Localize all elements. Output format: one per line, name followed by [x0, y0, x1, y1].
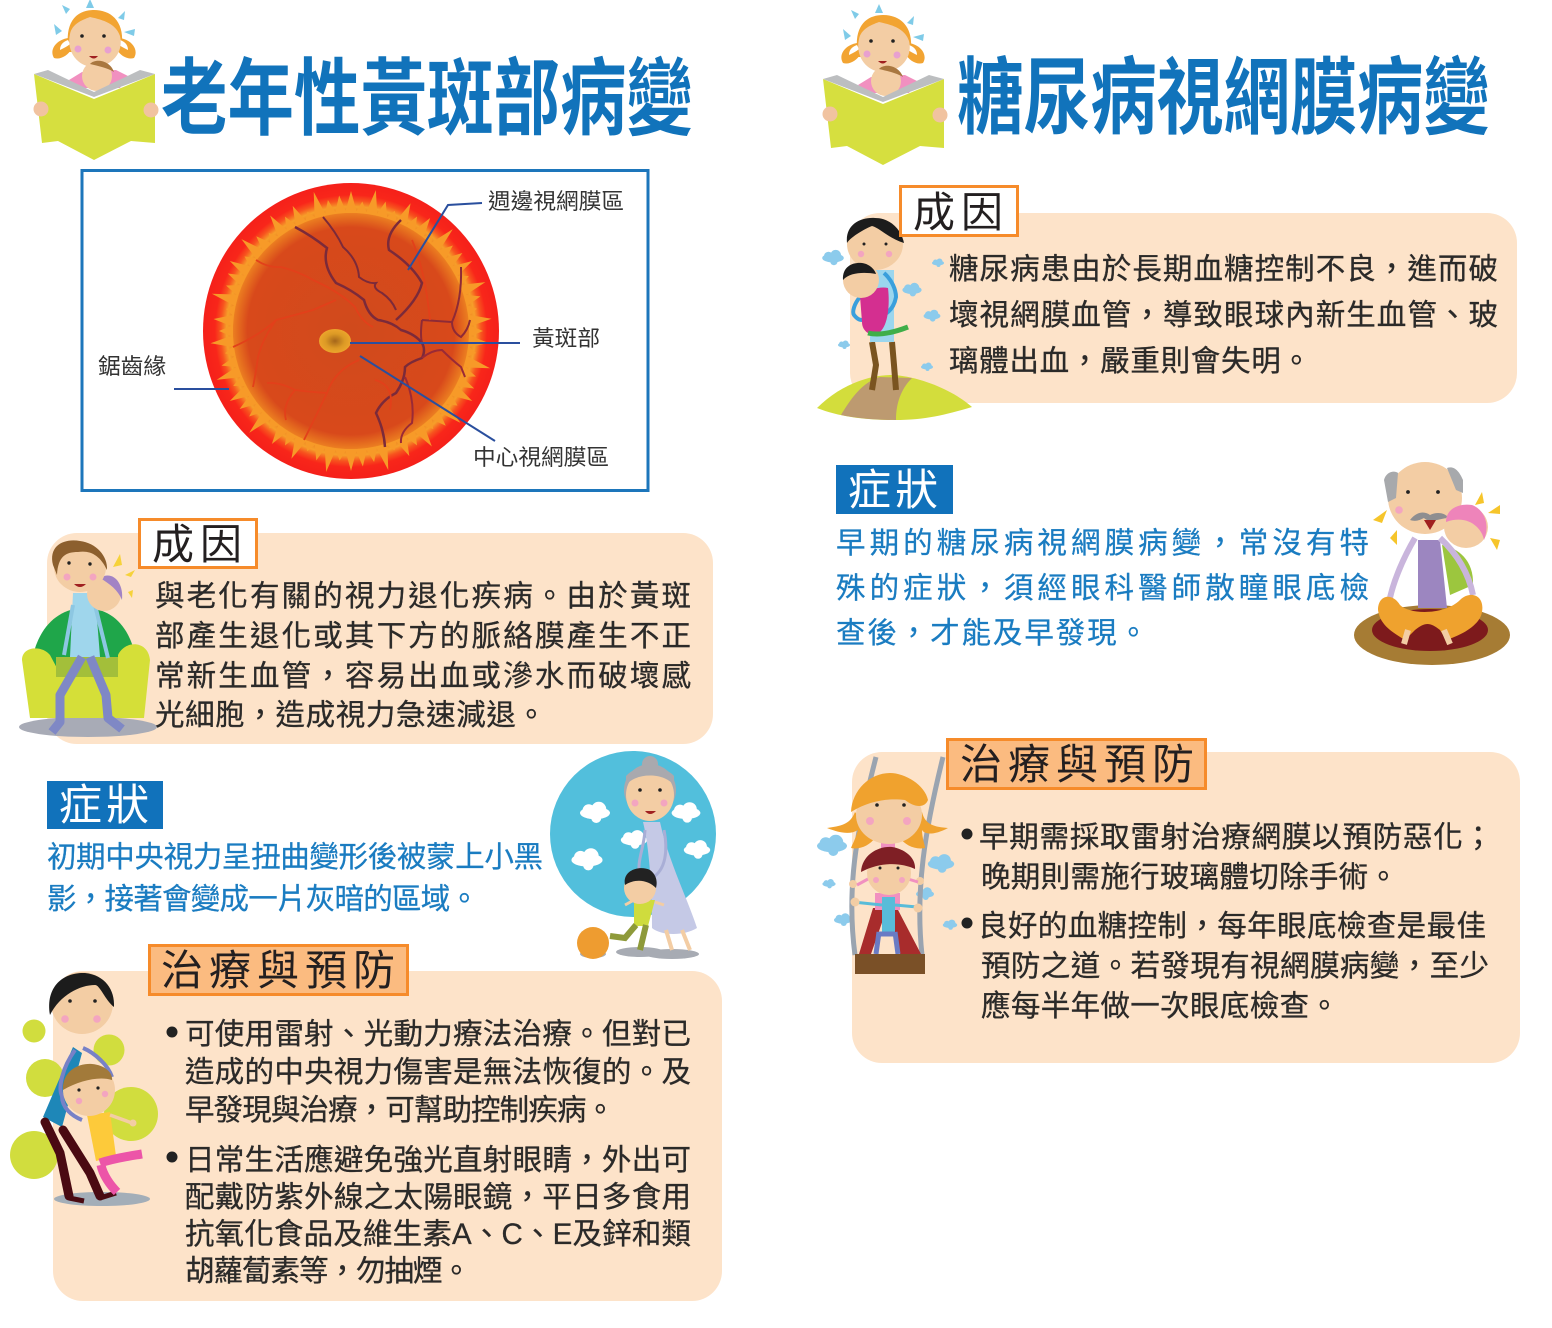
bullet list: treatment: 晚期則需施行玻璃體切除手術。	[981, 861, 1398, 894]
text: causes	[155, 580, 691, 732]
text: causes: 光細胞，造成視力急速減退。	[155, 699, 546, 732]
text: symptoms: 查後，才能及早發現。	[836, 617, 1148, 650]
text: symptoms	[47, 841, 543, 916]
bullet list: treatment: 應每半年做一次眼底檢查。	[981, 990, 1339, 1023]
heading label: symptoms: 症狀	[59, 782, 149, 830]
heading label: causes: 成因	[913, 189, 1003, 236]
panel: causes (left)	[19, 520, 713, 744]
text: causes: 璃體出血，嚴重則會失明。	[949, 345, 1311, 378]
macula	[319, 329, 351, 353]
bullet list: treatment: 胡蘿蔔素等，勿抽煙。	[185, 1255, 471, 1288]
text: causes: 與老化有關的視力退化疾病。由於黃斑	[155, 580, 691, 613]
illustration: children on a swing	[817, 757, 957, 974]
label: peripheral retina: 週邊視網膜區	[488, 189, 624, 214]
diagram frame	[82, 170, 648, 490]
panel background	[850, 213, 1517, 403]
illustration: grandfather and grandchild	[1354, 462, 1510, 665]
section: symptoms (right)	[836, 462, 1510, 665]
icon: girl reading a book	[822, 4, 948, 165]
bullet list: treatment	[166, 1018, 691, 1288]
bullet list: treatment: 良好的血糖控制，每年眼底檢查是最佳	[978, 910, 1486, 943]
illustration: grandmother and child with ball	[550, 751, 716, 959]
bullet list: treatment: 配戴防紫外線之太陽眼鏡，平日多食用	[185, 1181, 691, 1214]
text: symptoms: 早期的糖尿病視網膜病變，常沒有特	[836, 527, 1369, 560]
text: symptoms: 初期中央視力呈扭曲變形後被蒙上小黑	[47, 841, 543, 874]
bullet list: treatment	[962, 821, 1493, 1023]
title: left: 老年性黃斑部病變	[161, 52, 693, 146]
heading label: symptoms: 症狀	[848, 467, 938, 515]
text: causes: 常新生血管，容易出血或滲水而破壞感	[155, 660, 691, 693]
text: symptoms: 殊的症狀，須經眼科醫師散瞳眼底檢	[836, 572, 1369, 605]
section: symptoms (left)	[47, 751, 716, 959]
panel background	[852, 752, 1520, 1063]
bullet list: treatment: 造成的中央視力傷害是無法恢復的。及	[185, 1056, 691, 1089]
bullet list: treatment: 日常生活應避免強光直射眼睛，外出可	[185, 1144, 691, 1177]
panel: treatment and prevention (right)	[817, 740, 1520, 1063]
panel: treatment and prevention (left)	[10, 946, 722, 1301]
label: macula: 黃斑部	[532, 326, 600, 351]
bullet list: treatment: 可使用雷射、光動力療法治療。但對已	[185, 1018, 691, 1051]
illustration: parent dancing with child	[10, 972, 158, 1206]
heading label: treatment: 治療與預防	[960, 741, 1194, 788]
left column: age-related macular degeneration	[10, 0, 722, 1301]
panel background	[47, 533, 713, 744]
text: causes	[949, 253, 1498, 378]
text: symptoms	[836, 527, 1369, 650]
text: causes: 壞視網膜血管，導致眼球內新生血管、玻	[949, 299, 1498, 332]
illustration: man in armchair	[19, 540, 157, 737]
text: causes: 部產生退化或其下方的脈絡膜產生不正	[155, 620, 691, 653]
label: central retina: 中心視網膜區	[473, 445, 609, 470]
heading label: causes: 成因	[152, 521, 242, 568]
right column: diabetic retinopathy	[817, 4, 1520, 1063]
bullet list: treatment: 早期需採取雷射治療網膜以預防惡化；	[979, 821, 1493, 854]
panel: causes (right)	[817, 186, 1517, 420]
heading label: treatment: 治療與預防	[161, 947, 395, 994]
text: symptoms: 影，接著會變成一片灰暗的區域。	[47, 883, 479, 916]
diagram: retina	[82, 161, 648, 501]
label: ora serrata: 鋸齒緣	[98, 354, 166, 379]
callout lines	[174, 203, 520, 441]
bullet list: treatment: 預防之道。若發現有視網膜病變，至少	[981, 950, 1489, 983]
bullet list: treatment: 早發現與治療，可幫助控制疾病。	[185, 1094, 615, 1127]
bullet list: treatment: 抗氧化食品及維生素A、C、E及鋅和類	[185, 1218, 691, 1251]
panel background	[53, 971, 722, 1301]
icon: girl reading a book	[34, 0, 158, 160]
retina disc	[171, 161, 531, 501]
text: causes: 糖尿病患由於長期血糖控制不良，進而破	[949, 253, 1498, 286]
illustration: parent carrying child on a hill	[817, 218, 972, 420]
